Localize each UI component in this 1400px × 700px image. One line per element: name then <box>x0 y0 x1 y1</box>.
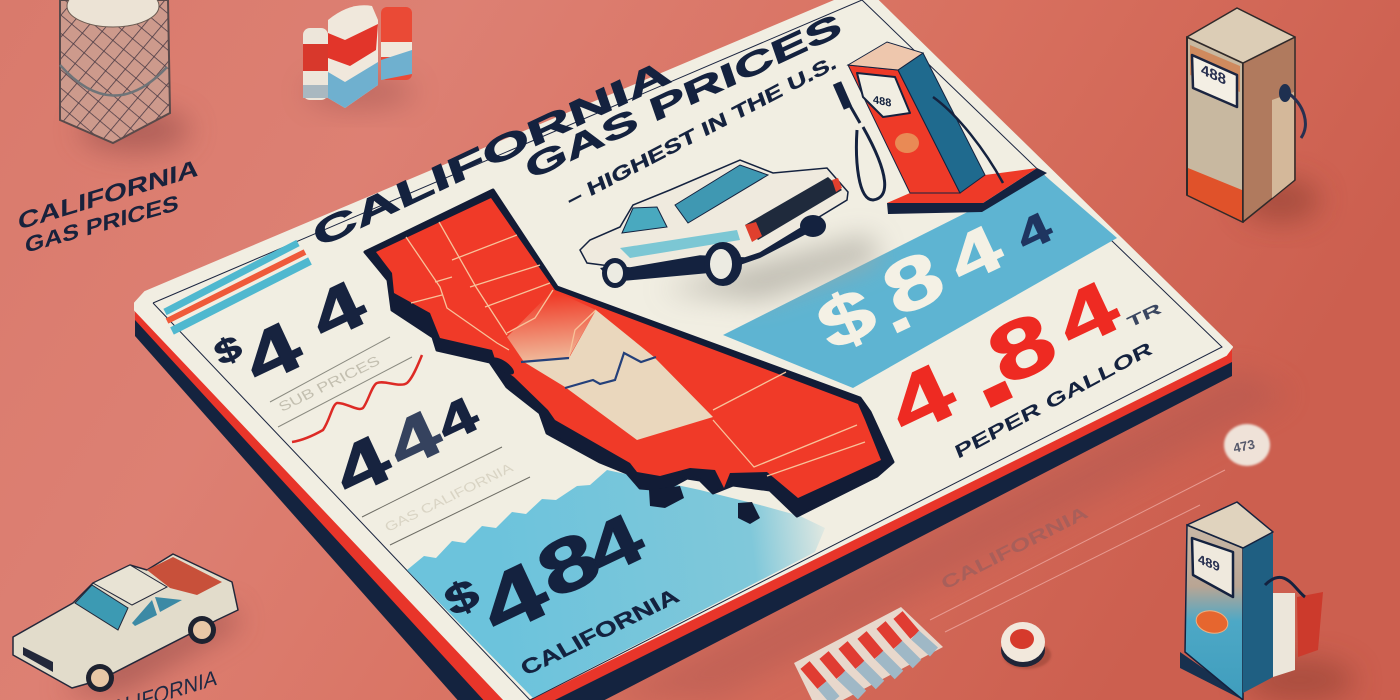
pump top <box>848 42 923 70</box>
price: red per gallon <box>874 265 1164 463</box>
side window <box>622 207 667 233</box>
map upper gradient area <box>507 290 596 362</box>
left price: top: 4 <box>299 266 377 355</box>
title line: California: CALIFORNIA <box>308 51 675 255</box>
panel: main card <box>135 0 1232 700</box>
price: red per gallon: 4 <box>1044 265 1132 365</box>
car shadow <box>660 235 880 300</box>
red trend line <box>292 355 422 442</box>
bottom price <box>437 497 684 681</box>
bottom price: 4 <box>466 543 562 653</box>
pump front <box>848 65 960 193</box>
pump hose <box>1287 92 1305 138</box>
map pale area <box>524 310 713 440</box>
bottom price: 4 <box>573 497 655 591</box>
pump side <box>1243 37 1295 222</box>
rear window <box>675 165 768 223</box>
left price: top: 4 <box>231 305 313 399</box>
pump hose <box>1265 577 1305 597</box>
pump front <box>1187 37 1243 222</box>
sub price caption <box>270 337 412 427</box>
left price: middle: 4 <box>428 385 487 453</box>
county lines <box>406 222 865 476</box>
California caption <box>362 447 530 545</box>
California label: CALIFORNIA <box>516 584 684 681</box>
bottom price: 8 <box>525 515 612 615</box>
right can <box>381 7 412 80</box>
pump screen <box>1192 538 1233 597</box>
icon: cans <box>303 5 415 108</box>
pump top <box>1187 8 1295 63</box>
bottom price: $ <box>437 569 486 625</box>
middle can <box>328 5 378 108</box>
title line: Highest in the U.S.: – HIGHEST IN THE U.S. <box>564 50 839 211</box>
panel: blue band right <box>723 174 1117 388</box>
pump front <box>1185 525 1243 700</box>
left price: middle: 4 <box>376 395 453 483</box>
icon: pickup truck <box>13 554 240 695</box>
bay notch <box>489 354 517 378</box>
blue wavy line <box>521 353 656 388</box>
price: red per gallon: . <box>933 291 1035 438</box>
left price: top <box>208 266 377 399</box>
price: red per gallon: 8 <box>974 293 1070 403</box>
car side stripe <box>620 230 740 258</box>
map shadow outline <box>365 190 893 516</box>
California caption: GAS CALIFORNIA <box>382 461 516 535</box>
pump side <box>1243 533 1273 693</box>
price: red per gallon: 4 <box>874 345 968 453</box>
icon: car on card <box>580 160 880 300</box>
icon: gas pump top right <box>1187 8 1320 222</box>
rear panel <box>745 177 842 240</box>
pump screen <box>857 73 910 117</box>
pump base <box>887 168 1047 214</box>
price: white on blue: $ <box>805 271 887 365</box>
pump screen <box>1192 55 1237 107</box>
title line: Gas Prices: GAS PRICES <box>520 6 846 186</box>
windshield <box>75 585 128 630</box>
card surface <box>135 0 1232 700</box>
sub price caption: SUB PRICES <box>276 354 383 415</box>
side windows <box>132 600 157 626</box>
hoses <box>837 83 885 200</box>
panel: blue band bottom <box>407 470 825 698</box>
pump base <box>1180 652 1243 700</box>
car body <box>580 160 848 268</box>
label: California Gas Prices (left): GAS PRICES <box>25 190 179 258</box>
unit: TR <box>1125 299 1164 331</box>
left price: top: $ <box>208 327 247 373</box>
cab roof <box>93 565 167 605</box>
icon: red token <box>1001 622 1051 669</box>
grille <box>23 647 53 672</box>
icon: price badge <box>1224 424 1270 466</box>
car underside <box>600 215 818 282</box>
left price: middle <box>322 385 487 511</box>
icon: price badge: 473 <box>1232 437 1256 456</box>
icon: gas pump bottom right: 489 <box>1198 551 1220 575</box>
map: California <box>365 190 893 524</box>
title <box>308 6 846 255</box>
faded streak lines <box>930 470 1225 632</box>
price: white on blue: . <box>867 270 922 348</box>
label: California Gas Prices (left): CALIFORNIA <box>18 155 198 236</box>
per gallon label: PEPER GALLOR <box>952 338 1155 463</box>
wheels <box>602 258 628 288</box>
icon: gas pump bottom right <box>1180 502 1355 700</box>
wheels <box>86 664 114 692</box>
card edge <box>135 304 1232 700</box>
label: California (faded): CALIFORNIA <box>938 502 1091 594</box>
pump emblem <box>895 133 919 153</box>
map red fill <box>376 198 881 498</box>
icon: gas pump on card <box>837 42 1047 214</box>
icon: striped sample tiles <box>794 607 943 700</box>
islands <box>649 486 684 508</box>
left can <box>303 28 328 100</box>
price: white on blue: 4 <box>1009 203 1060 261</box>
inner border <box>153 0 1222 700</box>
label: California Gas Prices (left) <box>18 155 198 258</box>
pump top <box>1187 502 1273 548</box>
price: white on blue: 4 <box>937 210 1014 298</box>
pump emblem <box>1194 608 1230 636</box>
icon: gas pump on card: 488 <box>873 94 891 110</box>
truck bed <box>147 557 222 595</box>
card shadow <box>600 370 1290 700</box>
icon: gas pump top right: 488 <box>1201 62 1226 89</box>
left price: middle: 4 <box>322 419 402 511</box>
stripes decoration <box>165 243 310 331</box>
truck body <box>13 554 238 688</box>
price: white on blue <box>805 203 1060 365</box>
can behind pump <box>1297 592 1323 657</box>
icon: mesh basket <box>60 0 190 152</box>
pump side <box>898 53 985 193</box>
price: white on blue: 8 <box>870 234 956 332</box>
